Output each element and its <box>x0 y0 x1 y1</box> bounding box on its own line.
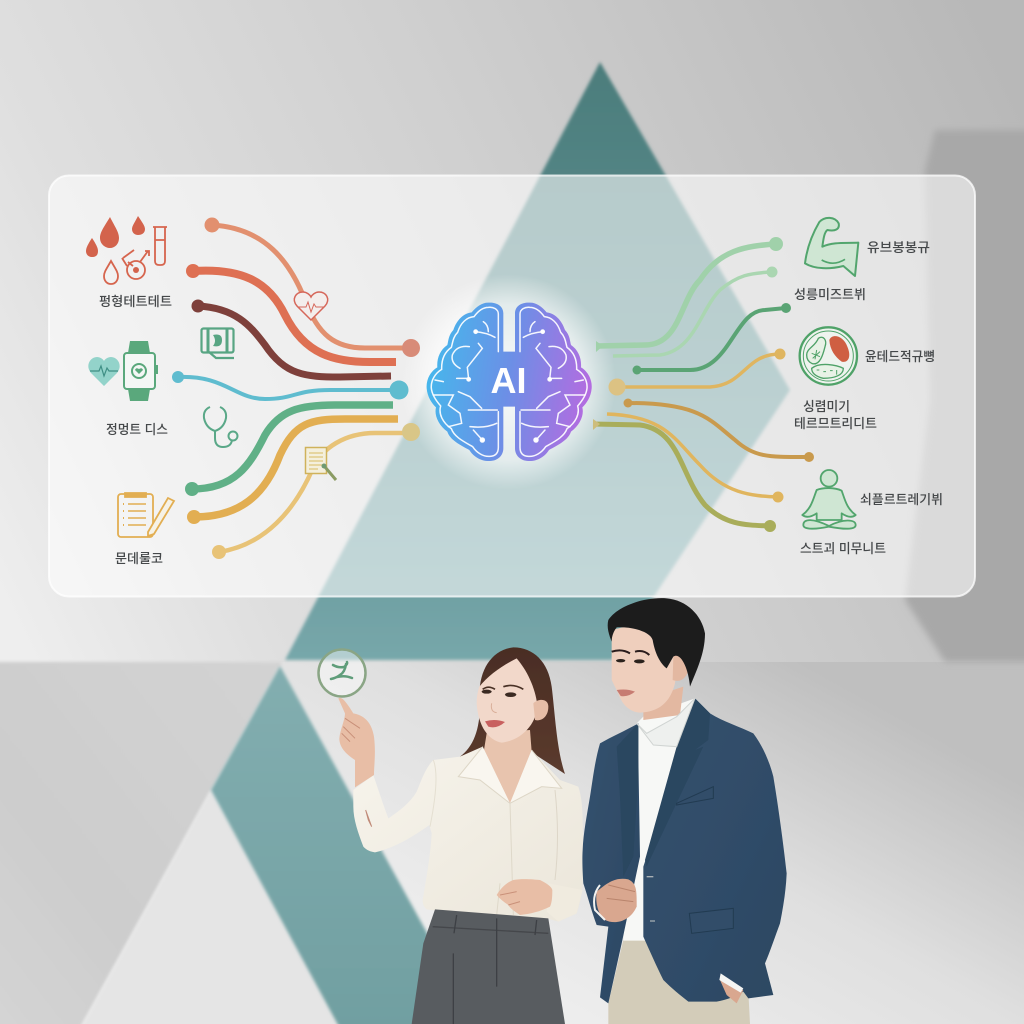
icon: blood drops and test tube <box>86 216 167 284</box>
brain label: AI: AI <box>490 360 526 401</box>
label: right group 2 sub line 2: 테르므트리디트 <box>794 416 877 431</box>
label: right group 1 heading: 유브봉봉규 <box>867 240 930 255</box>
icon: kidney monitor <box>202 328 234 358</box>
label: left group 3: 문데룰코 <box>115 551 163 566</box>
input data streams <box>172 218 420 559</box>
icon: smartwatch with heart <box>88 341 158 401</box>
panel: glass AI diagram <box>49 176 975 596</box>
label: right group 3 sub: 스트괴 미무니트 <box>800 541 886 556</box>
figure: man in blazer <box>582 598 787 1024</box>
icon: AI brain <box>427 303 592 461</box>
icon: clipboard and pencil <box>118 493 174 537</box>
icon: flexed arm muscle <box>805 218 858 276</box>
label: right group 2 heading: 윤테드적규뼝 <box>865 349 935 364</box>
label: right group 1 sub: 성릉미즈트뷔 <box>794 287 866 302</box>
icon: floating selection circle <box>318 650 366 696</box>
output data streams <box>593 237 814 532</box>
label: left group 2: 정멍트 디스 <box>106 422 168 437</box>
glow behind brain <box>400 274 616 490</box>
icon: stethoscope <box>204 407 238 447</box>
label: left group 1: 펑형테트테트 <box>99 294 172 309</box>
icon: meditating person <box>802 470 856 529</box>
label: right group 2 sub line 1: 싱렴미기 <box>803 399 850 414</box>
icon: document with magnifier <box>306 448 336 480</box>
figure: woman pointing <box>338 647 583 1024</box>
icon: nutrition plate <box>800 327 857 385</box>
icon: heart on stream <box>294 292 328 320</box>
label: right group 3 heading: 쇠플르트레기뷔 <box>860 492 943 507</box>
